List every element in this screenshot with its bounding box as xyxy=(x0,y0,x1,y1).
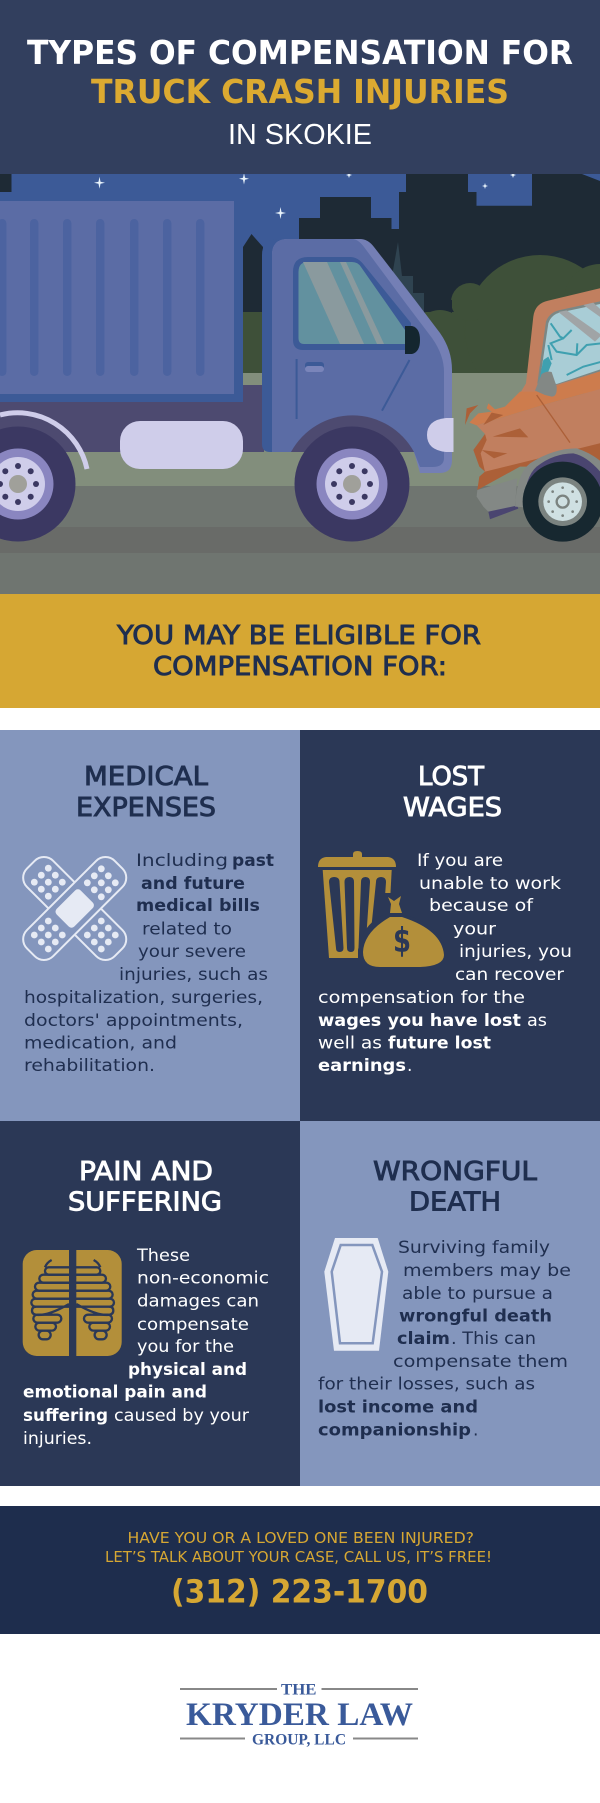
illustration: truck crash scene xyxy=(0,172,600,594)
cta line 1: HAVE YOU OR A LOVED ONE BEEN INJURED? xyxy=(128,1529,474,1547)
trees xyxy=(243,255,600,405)
logo: KRYDER LAW xyxy=(186,1697,413,1733)
rear wheel arch xyxy=(0,420,73,452)
truck box xyxy=(0,194,243,402)
fuel tank xyxy=(120,421,243,469)
gold band xyxy=(0,594,600,708)
lost wages body text: future lost xyxy=(388,1034,491,1054)
truck cab xyxy=(262,239,454,473)
pain body text: you for the xyxy=(137,1337,234,1357)
wrongful heading xyxy=(373,1157,538,1218)
pain body text: caused by your xyxy=(114,1406,249,1426)
wrongful body text: . xyxy=(473,1421,478,1441)
pain body text xyxy=(23,1246,269,1449)
lost wages body text: If you are xyxy=(417,851,503,871)
wrongful body text: able to pursue a xyxy=(402,1284,553,1304)
icon: trash can and money bag xyxy=(318,851,448,971)
pain body text: injuries. xyxy=(23,1429,92,1449)
lost wages body text: as xyxy=(527,1011,547,1031)
panel: medical expenses xyxy=(0,730,300,1121)
pain body text: physical and xyxy=(128,1360,247,1380)
panel: pain and suffering xyxy=(0,1121,300,1486)
side mirror xyxy=(405,326,420,354)
wrongful body text: wrongful death xyxy=(399,1307,552,1327)
pain heading xyxy=(68,1157,222,1218)
lost wages heading: WAGES xyxy=(403,793,502,823)
pain body text: non-economic xyxy=(137,1269,269,1289)
lost wages body text: earnings xyxy=(318,1056,406,1076)
lost wages body text xyxy=(318,851,572,1076)
lost wages body text: compensation for the xyxy=(318,988,525,1008)
lost wages body text: wages you have lost xyxy=(318,1011,521,1031)
pain body text: suffering xyxy=(23,1406,108,1426)
icon: trash can and money bag: $ xyxy=(393,921,411,961)
medical body text: related to xyxy=(142,920,232,940)
lost wages body text: can recover xyxy=(455,965,564,985)
truck chassis xyxy=(0,385,264,452)
pain body text: These xyxy=(136,1246,190,1266)
wrongful body text: for their losses, such as xyxy=(318,1375,535,1395)
pain heading: PAIN AND xyxy=(79,1157,213,1187)
medical body text: rehabilitation. xyxy=(24,1056,155,1076)
medical body text: injuries, such as xyxy=(119,965,268,985)
pain body text: compensate xyxy=(137,1315,249,1335)
icon: ribcage xyxy=(23,1250,122,1356)
front wheel xyxy=(294,426,410,542)
wrongful heading: WRONGFUL xyxy=(373,1157,538,1187)
title line 2: TRUCK CRASH INJURIES xyxy=(91,72,509,111)
cab window xyxy=(293,257,411,350)
cta line 2: LET’S TALK ABOUT YOUR CASE, CALL US, IT’S FREE! xyxy=(105,1548,492,1566)
front wheel arch xyxy=(291,415,414,452)
medical body text: and future xyxy=(141,874,245,894)
pain heading: SUFFERING xyxy=(68,1188,222,1218)
phone number: (312) 223-1700 xyxy=(171,1573,428,1611)
title line 1: TYPES OF COMPENSATION FOR xyxy=(27,33,573,72)
wrongful body text: Surviving family xyxy=(398,1238,550,1258)
wrongful body text: . This can xyxy=(451,1329,536,1349)
wrongful body text: compensate them xyxy=(393,1352,568,1372)
medical body text: doctors' appointments, xyxy=(24,1011,243,1031)
band heading line 2: COMPENSATION FOR: xyxy=(153,652,447,682)
call to action panel xyxy=(0,1506,600,1634)
icon: coffin xyxy=(324,1238,388,1351)
logo: GROUP, LLC xyxy=(252,1731,346,1748)
medical body text xyxy=(24,851,274,1076)
lost wages body text: well as xyxy=(318,1034,382,1054)
medical body text: medication, and xyxy=(24,1034,177,1054)
stars xyxy=(94,172,516,219)
wrongful body text: claim xyxy=(397,1329,450,1349)
medical body text: hospitalization, surgeries, xyxy=(24,988,263,1008)
medical body text: your severe xyxy=(138,942,246,962)
lost wages body text: because of xyxy=(429,896,534,916)
lost wages body text: your xyxy=(453,920,496,940)
medical body text: Including xyxy=(136,851,228,871)
band heading: YOU MAY BE ELIGIBLE FOR xyxy=(116,621,481,651)
lost wages body text: . xyxy=(407,1056,412,1076)
rear wheel xyxy=(0,426,76,542)
lost wages body text: injuries, you xyxy=(459,942,572,962)
logo xyxy=(180,1682,418,1748)
title line 3: IN SKOKIE xyxy=(228,119,372,151)
medical body text: past xyxy=(232,851,274,871)
wrongful heading: DEATH xyxy=(409,1188,501,1218)
pain body text: damages can xyxy=(137,1292,259,1312)
wrongful body text: companionship xyxy=(318,1421,471,1441)
crashed car xyxy=(465,287,600,542)
headlight xyxy=(427,418,454,452)
ground and road xyxy=(0,373,600,486)
logo: THE xyxy=(281,1682,316,1699)
wrongful body text xyxy=(318,1238,571,1441)
header panel xyxy=(0,0,600,174)
medical heading: EXPENSES xyxy=(76,793,216,823)
wrongful body text: members may be xyxy=(403,1261,571,1281)
icon: bandage xyxy=(18,852,132,965)
lost wages heading: LOST xyxy=(418,762,484,792)
pain body text: emotional pain and xyxy=(23,1383,207,1403)
medical heading: MEDICAL xyxy=(84,762,209,792)
medical heading xyxy=(76,762,216,823)
lost wages body text: unable to work xyxy=(419,874,561,894)
wrongful body text: lost income and xyxy=(318,1398,478,1418)
medical body text: medical bills xyxy=(136,896,260,916)
panel: lost wages xyxy=(300,730,600,1121)
lost wages heading xyxy=(403,762,502,823)
door details xyxy=(297,359,410,419)
panel: wrongful death xyxy=(300,1121,600,1486)
